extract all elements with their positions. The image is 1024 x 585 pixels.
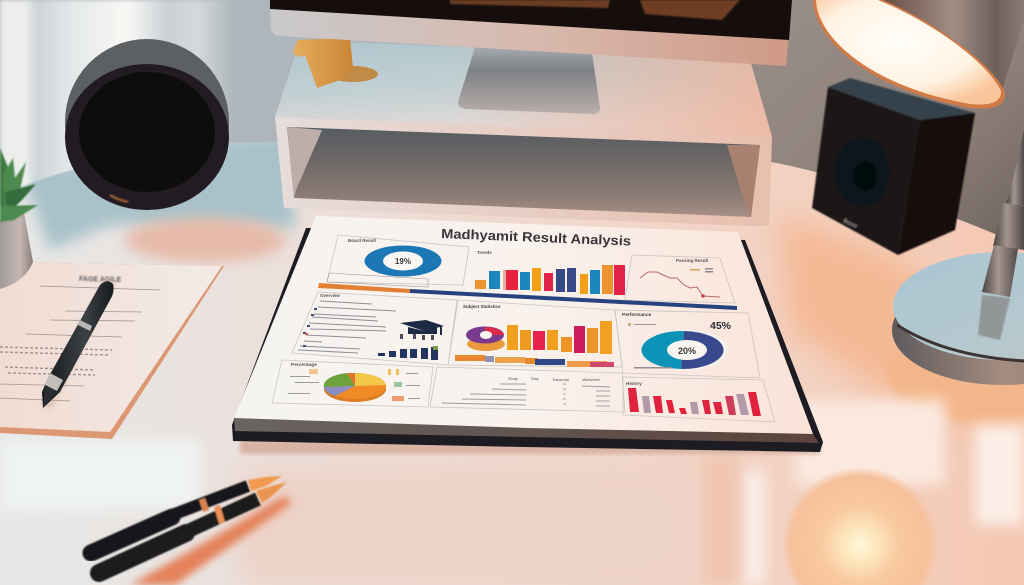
headline value: 45% xyxy=(710,320,732,332)
lamp shade xyxy=(883,0,1024,88)
lamp xyxy=(813,0,1024,385)
performance donut xyxy=(622,312,732,370)
monitor stand xyxy=(458,47,600,114)
table header: Study xyxy=(508,377,518,381)
pen pair bottom left xyxy=(91,476,292,585)
plant xyxy=(0,148,38,289)
riser front xyxy=(275,117,772,226)
data table: Marksheet xyxy=(582,378,601,382)
desk peach glow right xyxy=(780,215,1024,440)
panel frames xyxy=(272,235,775,422)
riser top xyxy=(275,40,772,137)
desk surface xyxy=(0,130,1024,585)
data table xyxy=(442,377,610,406)
desk blue reflection xyxy=(20,130,295,250)
left notebook xyxy=(0,262,224,439)
report page xyxy=(234,216,813,434)
binder page edges xyxy=(234,417,819,443)
plant pot xyxy=(0,207,33,289)
lamp pole xyxy=(1006,130,1024,205)
riser opening xyxy=(287,127,760,217)
bars xyxy=(507,325,518,350)
data table: Transcript xyxy=(552,378,570,382)
notebook lines xyxy=(0,286,160,401)
icon: graduation cap xyxy=(400,320,444,340)
desk lamp light reflection xyxy=(780,465,940,585)
top left donut xyxy=(348,238,442,276)
desk reflection pale rectangles xyxy=(795,400,945,485)
donut value: 20% xyxy=(678,346,696,356)
pen one xyxy=(91,476,282,553)
monitor riser xyxy=(275,40,772,226)
list rows xyxy=(298,301,396,353)
table rows xyxy=(442,384,610,406)
desk speaker xyxy=(812,78,975,255)
pen two xyxy=(99,482,287,573)
panel label: Performance xyxy=(622,312,652,318)
plant leaves xyxy=(0,148,38,222)
round speaker xyxy=(65,39,229,210)
legend strip xyxy=(455,355,485,361)
page sheet xyxy=(234,216,813,434)
3d donut xyxy=(467,337,505,351)
list heading: Overview xyxy=(320,293,341,298)
monitor bezel xyxy=(270,0,792,66)
pie chart panel xyxy=(288,362,420,402)
desk warm shadow xyxy=(125,218,285,262)
analysis list panel xyxy=(298,293,396,353)
background wall xyxy=(0,0,1024,260)
chart label: Trends xyxy=(477,250,492,255)
notebook heading: FAGE AGILE xyxy=(79,276,122,284)
bottom right bar chart xyxy=(626,381,761,416)
section divider xyxy=(318,283,737,310)
small navy bars xyxy=(378,346,438,360)
report title: Madhyamit Result Analysis xyxy=(441,226,631,249)
pie legend xyxy=(288,369,420,401)
monitor screen xyxy=(270,0,792,40)
curtain xyxy=(0,0,232,190)
chart label: Passing Result xyxy=(676,258,709,263)
pen on notebook xyxy=(42,281,114,408)
speaker brand: Bose xyxy=(842,218,859,230)
panel label: Percentage xyxy=(291,362,317,368)
middle combo chart xyxy=(455,304,614,367)
gold clip xyxy=(293,38,378,88)
top bar chart xyxy=(475,250,625,295)
chart label: Subject Statistics xyxy=(463,304,501,309)
donut value: 19% xyxy=(395,257,411,266)
caption box xyxy=(327,273,428,287)
lamp base xyxy=(892,275,1024,385)
binder xyxy=(232,228,823,452)
line chart xyxy=(640,258,720,298)
lamp light xyxy=(813,0,1005,109)
monitor xyxy=(270,0,792,66)
chart label: History xyxy=(626,381,642,386)
lamp base reflection xyxy=(888,352,1024,424)
donut label: Board Result xyxy=(348,238,377,243)
data table: Stay xyxy=(531,377,539,381)
